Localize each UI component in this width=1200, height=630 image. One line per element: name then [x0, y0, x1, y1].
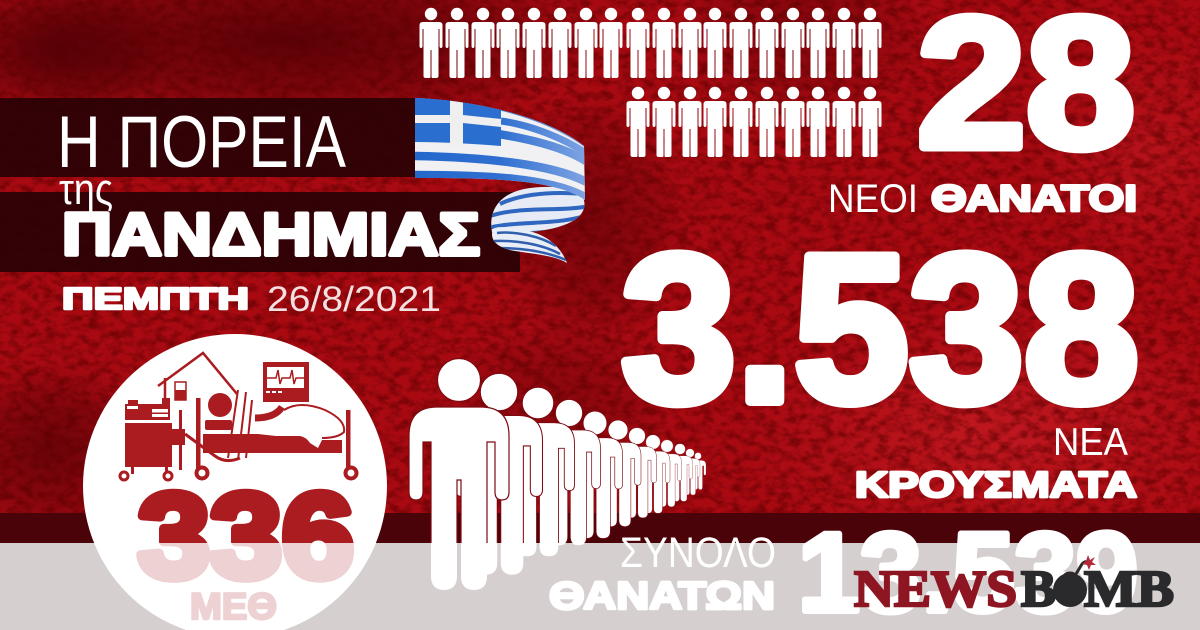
logo: Newsbomb — [854, 555, 1174, 618]
icon: Greek flag ribbon — [415, 98, 585, 263]
title: της: της — [59, 165, 113, 214]
logo: Newsbomb: B — [1021, 561, 1056, 618]
title: ΠΑΝΔΗΜΙΑΣ: ΠΑΝΔΗΜΙΑΣ — [62, 201, 480, 268]
pale overlay on footer part of circle — [80, 543, 390, 630]
queue legs over footer — [431, 543, 584, 590]
date: numeric: 26/8/2021 — [267, 280, 441, 319]
ribbon back loop — [491, 186, 584, 232]
label: ΝΕΟΙ: ΝΕΟΙ — [828, 177, 918, 221]
icon: queue of people — [409, 358, 706, 590]
ribbon main stripes — [415, 98, 585, 200]
date: weekday: ΠΕΜΠΤΗ — [62, 281, 249, 316]
dark band above footer — [0, 513, 1200, 543]
title bar: upper — [0, 98, 416, 177]
icon: ICU bed with ventilator — [120, 353, 356, 480]
logo: Newsbomb: NEWS — [854, 561, 1017, 618]
label: ΚΡΟΥΣΜΑΤΑ: ΚΡΟΥΣΜΑΤΑ — [855, 464, 1137, 505]
label: ΘΑΝΑΤΩΝ: ΘΑΝΑΤΩΝ — [549, 575, 775, 618]
logo: Newsbomb: O — [1058, 561, 1082, 618]
label: ΜΕΘ: ΜΕΘ — [190, 586, 277, 627]
pictogram row: 18 of 28 deaths — [420, 8, 882, 78]
circle: ICU panel — [80, 334, 390, 630]
number: 3.538 new cases: 3.538 — [621, 211, 1139, 446]
light footer band — [0, 543, 1200, 630]
label: ΣΥΝΟΛΟ: ΣΥΝΟΛΟ — [620, 529, 776, 577]
label: ΘΑΝΑΤΟΙ: ΘΑΝΑΤΟΙ — [931, 178, 1137, 219]
ribbon tail — [492, 227, 567, 263]
pictogram row: 10 of 28 deaths — [626, 87, 882, 157]
icon: bomb — [1053, 555, 1096, 607]
title: Η ΠΟΡΕΙΑ: Η ΠΟΡΕΙΑ — [57, 102, 346, 183]
logo: Newsbomb: MB — [1084, 561, 1174, 618]
label: ΝΕΑ: ΝΕΑ — [1053, 421, 1128, 464]
number: 336 ICU patients: 336 — [138, 469, 354, 603]
title bar: lower — [0, 192, 520, 272]
